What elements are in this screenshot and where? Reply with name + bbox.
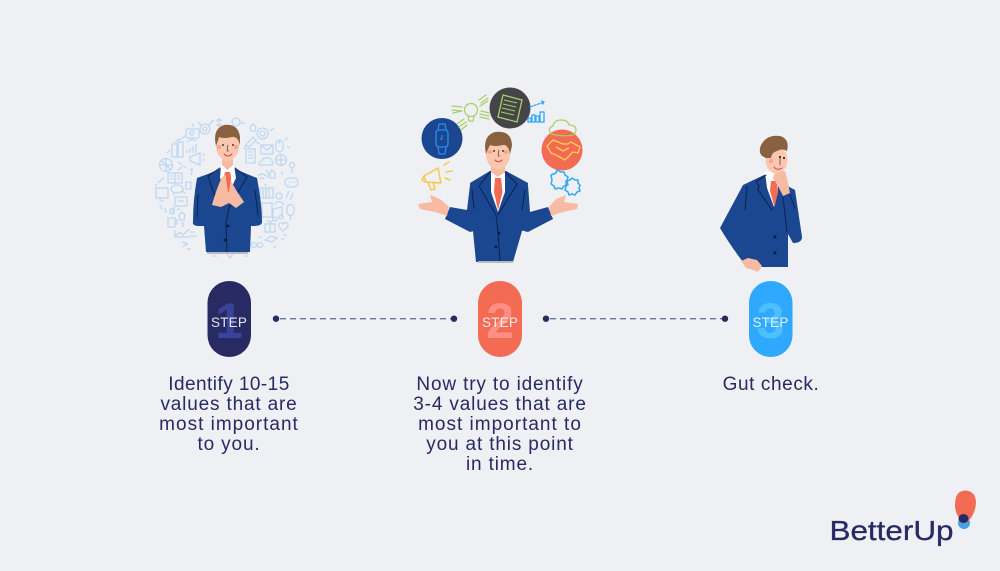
jacket: [470, 171, 528, 262]
illustration: step 2 man with floating icons: [418, 88, 582, 263]
right hand: [549, 195, 578, 216]
step 1 description: to you.: [198, 434, 260, 455]
step 1 description: most important: [159, 414, 299, 435]
icon: document circle: [490, 88, 530, 128]
BetterUp logo: [830, 490, 976, 546]
step 3 description: Gut check.: [723, 374, 819, 395]
doodle icon circle: [155, 118, 298, 258]
neck and head: [491, 160, 505, 177]
hair: [485, 132, 512, 154]
icon: megaphone: [422, 162, 452, 190]
shirt and tie: [220, 165, 236, 195]
icon: light bulb: [452, 95, 489, 130]
step 2 description: Now try to identify: [416, 374, 584, 395]
shirt and tie: [491, 171, 505, 212]
neck and head: [222, 157, 233, 170]
icon: gears: [551, 170, 580, 195]
step 1 badge: [208, 281, 251, 357]
icon: cloud: [549, 120, 576, 136]
step 3 badge: [749, 281, 792, 357]
illustration: step 3 thinking man: [720, 136, 802, 272]
connector 2 to 3: [543, 316, 728, 322]
jacket lines: [745, 175, 795, 232]
step 1 badge: STEP: [211, 315, 247, 330]
connector 1 to 2: [273, 316, 457, 322]
arms: [445, 185, 553, 232]
lapels and jacket lines: [197, 168, 258, 252]
hands: [212, 175, 244, 208]
step 1 badge: 1: [215, 293, 243, 349]
lapels and jacket lines: [472, 172, 525, 262]
hair: [215, 125, 240, 146]
step 1 description: Identify 10-15: [168, 374, 290, 395]
logo wordmark: BetterUp: [830, 515, 954, 546]
lower hand: [741, 258, 762, 272]
step 3 badge: STEP: [752, 315, 789, 330]
jacket: [193, 168, 262, 252]
step 2 badge: 2: [486, 293, 514, 349]
logo mark: [955, 490, 976, 529]
step 3 badge: 3: [757, 293, 784, 349]
face: [488, 150, 508, 162]
step 2 badge: STEP: [482, 315, 518, 330]
step 1 description: values that are: [160, 394, 298, 415]
trouser hem: [478, 261, 513, 263]
hair: [760, 136, 788, 158]
thinking hand: [773, 171, 790, 196]
step 2 description: 3-4 values that are: [413, 394, 587, 415]
step 2 badge: [478, 281, 522, 357]
illustration: step 1 man with doodle circle: [155, 118, 298, 258]
face: [217, 144, 238, 156]
step 2 description: most important to: [418, 414, 582, 435]
step 2 description: you at this point: [426, 434, 574, 455]
icon: handshake circle: [542, 130, 582, 170]
head: [766, 146, 788, 174]
left hand: [418, 195, 449, 216]
icon: watch circle: [422, 118, 462, 159]
step 2 description: in time.: [466, 454, 534, 475]
icon: bar chart with arrow: [528, 101, 544, 122]
shirt and tie: [765, 172, 778, 207]
jacket: [720, 174, 802, 267]
face: [769, 156, 785, 169]
trouser hem: [207, 252, 248, 254]
